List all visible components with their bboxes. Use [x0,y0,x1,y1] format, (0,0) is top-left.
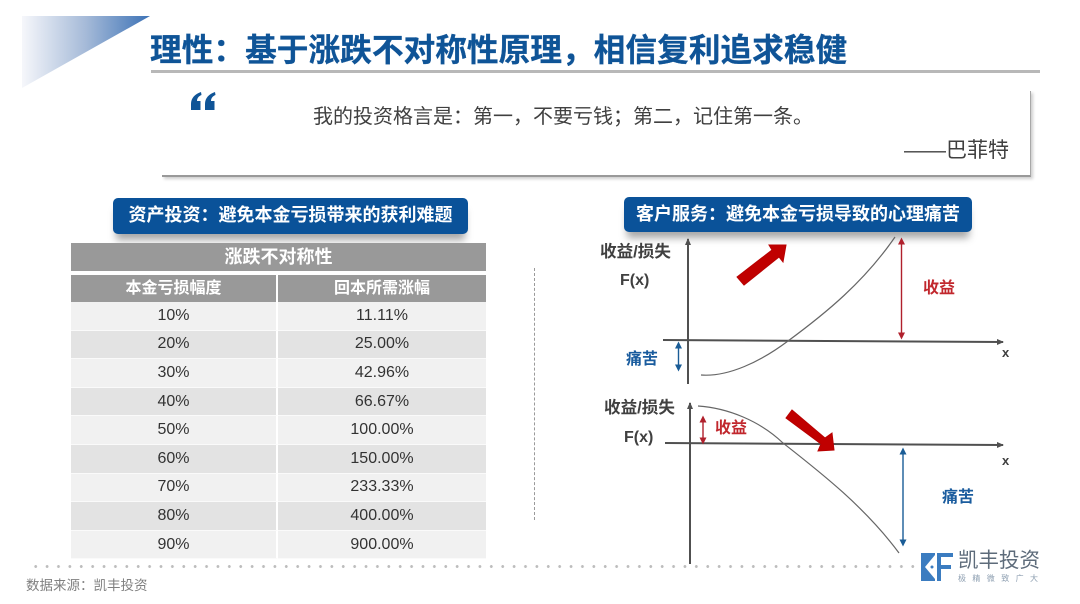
table: gain required to recover loss: 900.00% [350,536,414,553]
title: 理性：基于涨跌不对称性原理，相信复利追求稳健 [150,32,847,68]
table: gain required to recover loss: 11.11% [356,307,408,324]
chart: downside curve: F(x) [624,429,653,446]
title underline [151,70,1040,73]
table: gain required to recover loss: 40% [157,393,190,410]
table: gain required to recover loss: 25.00% [355,335,409,352]
logo tagline: 极精微致广大 [958,574,1044,583]
table: gain required to recover loss: 66.67% [355,393,409,410]
quote attribution: ——巴菲特 [904,139,1009,162]
chart: downside curve: 痛苦 [942,487,974,506]
table: gain required to recover loss: 涨跌不对称性 [224,247,332,267]
chart: upside curve: 收益/损失 [600,242,671,261]
heading: asset investment [113,198,468,234]
logo [921,549,1044,583]
icon: red down arrow [786,410,834,451]
gain range arrow [702,419,704,441]
table: gain required to recover loss: 60% [157,450,190,467]
chart: upside curve: 收益 [923,279,955,297]
chart: downside curve [604,398,1010,564]
heading: client service: 客户服务：避免本金亏损导致的心理痛苦 [636,204,960,224]
table: gain required to recover loss [71,243,486,558]
decorative gradient triangle [22,16,150,88]
table: gain required to recover loss: 100.00% [350,421,414,438]
table: gain required to recover loss: 42.96% [355,364,409,381]
gain range arrow [900,241,902,336]
chart: downside curve: 收益 [715,419,747,437]
chart: upside curve [600,237,1010,384]
table: gain required to recover loss: 回本所需涨幅 [334,280,430,297]
table: gain required to recover loss: 50% [157,421,190,438]
heading: client service [624,197,972,232]
table: gain required to recover loss: 400.00% [350,507,414,524]
heading: asset investment: 资产投资：避免本金亏损带来的获利难题 [128,205,452,225]
table: gain required to recover loss: 本金亏损幅度 [125,280,222,297]
chart: upside curve: F(x) [620,272,649,289]
table: gain required to recover loss: 233.33% [350,478,414,495]
chart: upside curve: 痛苦 [626,349,658,368]
pain range arrow [678,345,680,368]
source note: 数据来源：凯丰投资 [26,578,148,593]
table: gain required to recover loss: 150.00% [350,450,414,467]
box edges [162,91,1031,177]
pain range arrow [902,451,904,543]
logo mark [921,553,953,581]
table: gain required to recover loss: 90% [157,536,190,553]
icon: red up arrow [737,245,786,285]
chart: upside curve: x [1002,345,1010,360]
table: gain required to recover loss: 30% [157,364,190,381]
table: gain required to recover loss: 70% [157,478,190,495]
table: gain required to recover loss: 20% [157,335,190,352]
logo name: 凯丰投资 [958,549,1040,572]
table: gain required to recover loss: 80% [157,507,190,524]
chart: downside curve: 收益/损失 [604,398,675,417]
icon: quote mark [191,92,216,110]
quote box [162,91,1034,180]
quote text: 我的投资格言是：第一，不要亏钱；第二，记住第一条。 [313,106,813,128]
table: gain required to recover loss: 10% [157,307,190,324]
chart: downside curve: x [1002,453,1010,468]
